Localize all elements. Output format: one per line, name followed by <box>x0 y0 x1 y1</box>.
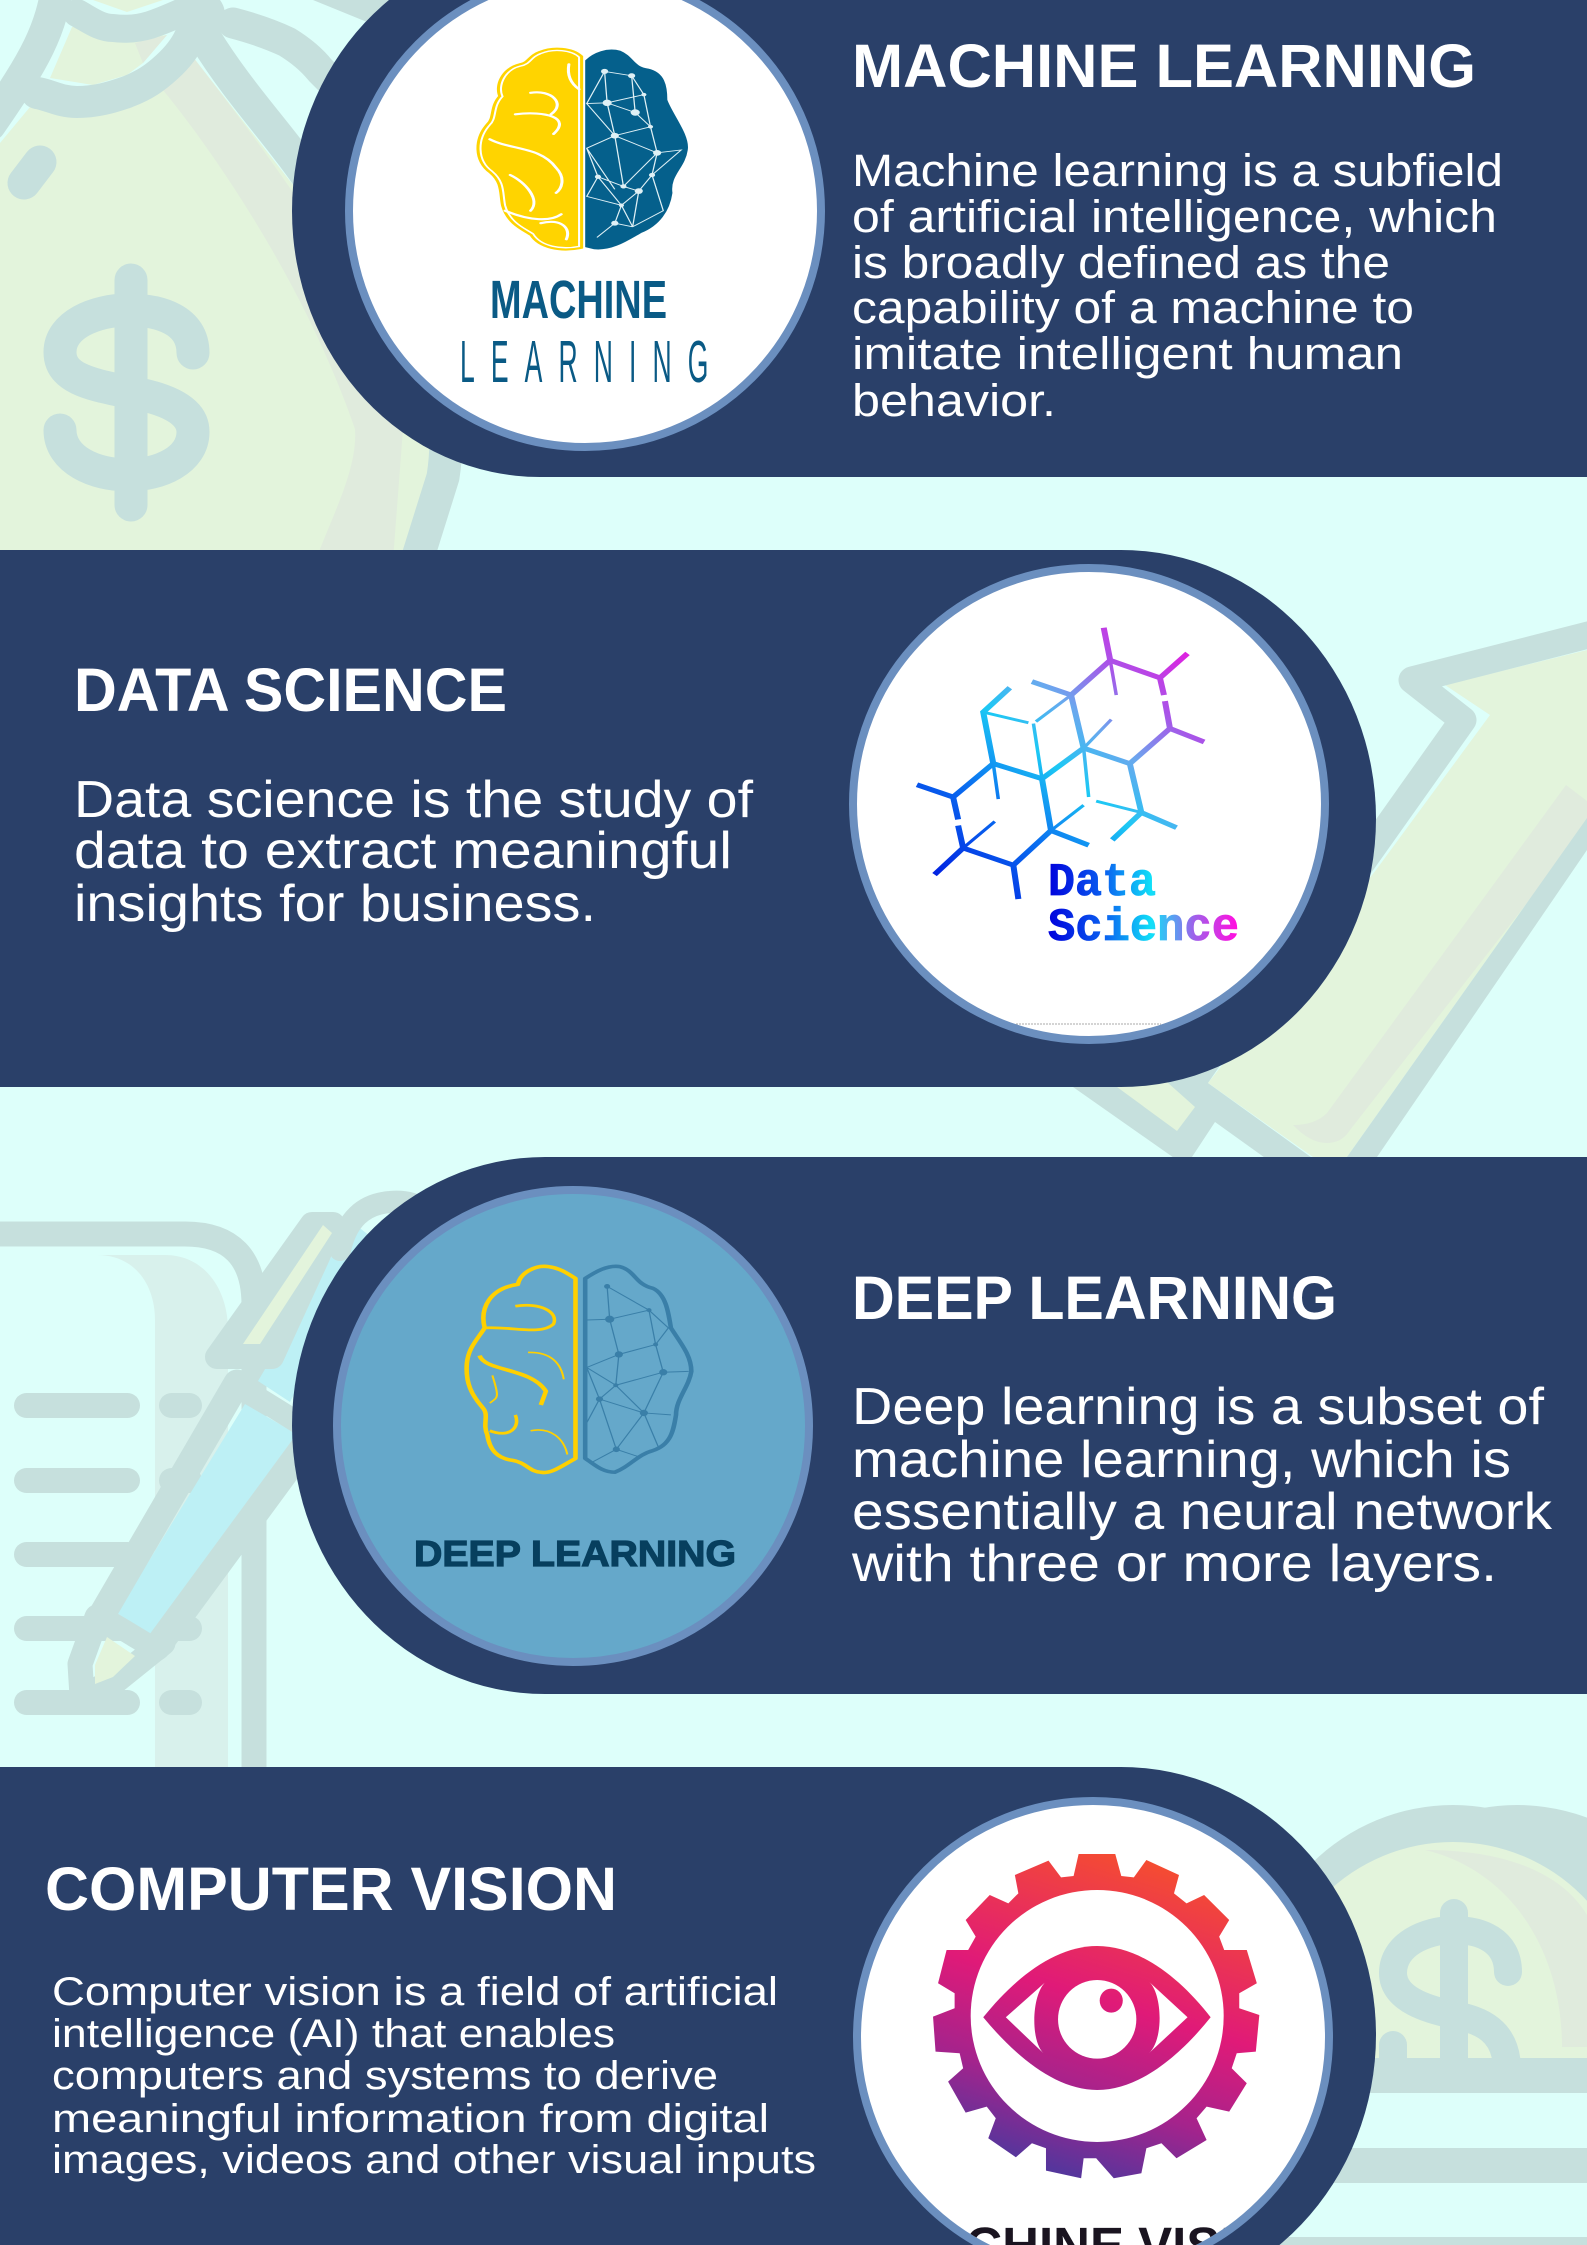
icon: brain logo <box>481 50 686 248</box>
body text: meaningful information from digital <box>52 2097 769 2141</box>
body text <box>851 1378 1553 1593</box>
body text: data to extract meaningful <box>74 822 732 880</box>
logo text: data science: Data <box>1048 857 1156 909</box>
icon: molecule network <box>917 628 1204 899</box>
panel background <box>0 550 1376 1087</box>
body text <box>74 771 754 933</box>
background icon: rising arrow <box>1073 632 1587 1160</box>
logo text: data science <box>1048 857 1239 954</box>
panel background <box>292 1157 1587 1694</box>
body text: of artificial intelligence, which <box>852 191 1497 242</box>
logo text: learning: LEARNING <box>460 329 708 395</box>
body text: Deep learning is a subset of <box>852 1378 1545 1436</box>
body text: essentially a neural network <box>852 1483 1553 1541</box>
body text: computers and systems to derive <box>52 2054 718 2098</box>
logo circle <box>349 0 821 447</box>
icon: gear with eye <box>933 1854 1259 2178</box>
heading: MACHINE LEARNING <box>852 32 1476 100</box>
panel: deep learning <box>292 1157 1587 1694</box>
background icon: money bag <box>0 0 446 560</box>
background icon: notebook and pen <box>0 1202 425 1767</box>
body text: insights for business. <box>74 875 596 933</box>
logo circle <box>337 1190 809 1662</box>
body text <box>852 145 1503 426</box>
heading: COMPUTER VISION <box>45 1855 617 1923</box>
body text: images, videos and other visual inputs <box>52 2138 816 2182</box>
panel: machine learning <box>292 0 1587 477</box>
heading: DATA SCIENCE <box>74 656 507 724</box>
body text: Computer vision is a field of artificial <box>52 1970 778 2014</box>
panel: data science <box>0 550 1376 1087</box>
body text: behavior. <box>852 375 1056 426</box>
body text: intelligence (AI) that enables <box>52 2012 615 2056</box>
body text: Machine learning is a subfield <box>852 145 1503 196</box>
heading: DEEP LEARNING <box>852 1264 1337 1332</box>
panel background <box>292 0 1587 477</box>
body text <box>52 1970 816 2182</box>
logo text: deep learning: DEEP LEARNING <box>414 1533 736 1574</box>
background icon: coins and dollar <box>1250 1805 1587 2245</box>
body text: Data science is the study of <box>74 771 754 829</box>
body text: is broadly defined as the <box>852 237 1390 288</box>
body text: imitate intelligent human <box>852 328 1403 379</box>
logo text: machine: MACHINE <box>490 270 667 330</box>
panel: computer vision <box>0 1767 1376 2245</box>
logo circle <box>853 568 1325 1040</box>
logo text: data science: Science <box>1048 902 1239 954</box>
body text: capability of a machine to <box>852 282 1414 333</box>
icon: outlined brain <box>467 1266 691 1473</box>
body text: machine learning, which is <box>852 1431 1511 1489</box>
logo circle <box>857 1801 1329 2245</box>
body text: with three or more layers. <box>851 1535 1497 1593</box>
panel background <box>0 1767 1376 2245</box>
